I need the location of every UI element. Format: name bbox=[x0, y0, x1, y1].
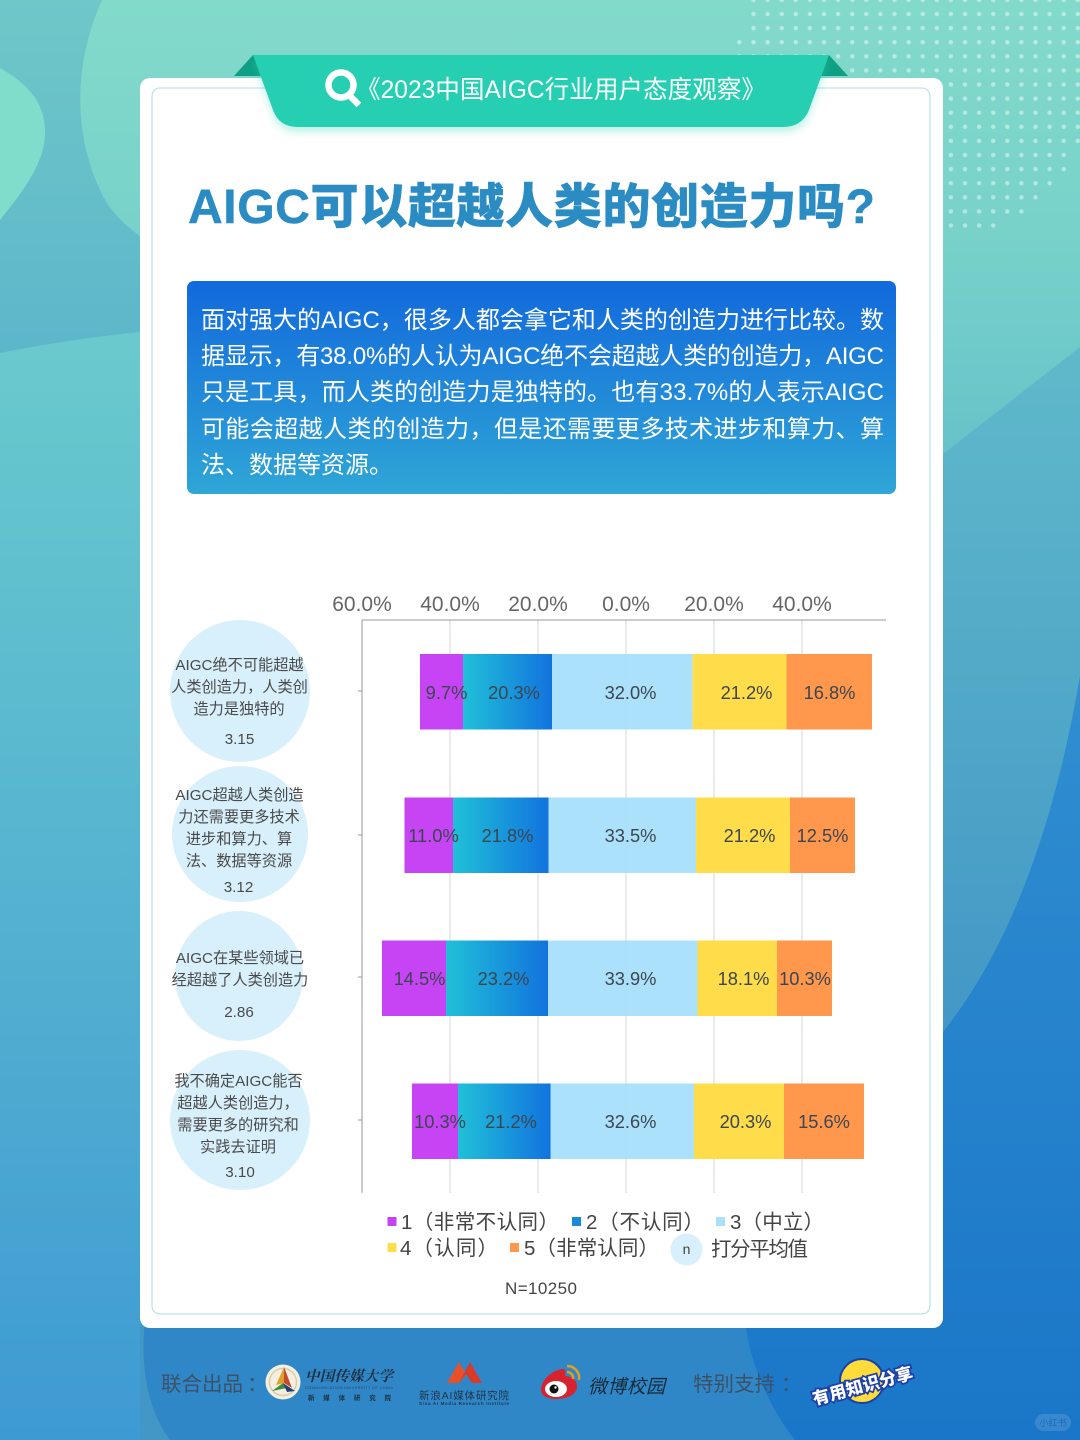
bar: row 2 bbox=[404, 798, 855, 873]
banner ribbon bbox=[234, 55, 848, 127]
icon: magnifier bbox=[328, 72, 359, 105]
intro text panel: 法、数据等资源。 bbox=[201, 452, 393, 479]
category: row 1 bbox=[170, 620, 310, 762]
banner title: 《2023中国AIGC行业用户态度观察》 bbox=[356, 76, 766, 104]
axis labels: 20.0% bbox=[684, 593, 744, 616]
logo: Sina AI Media Research Institute bbox=[419, 1362, 510, 1406]
axis labels: 20.0% bbox=[508, 593, 568, 616]
intro text panel: 可能会超越人类的创造力，但是还需要更多技术进步和算力、算 bbox=[201, 416, 884, 443]
logo: Weibo campus bbox=[541, 1366, 668, 1399]
category: row 3: 2.86 bbox=[224, 1004, 254, 1021]
axis labels bbox=[332, 593, 832, 616]
legend: 4（认同） bbox=[400, 1237, 498, 1260]
category: row 4: 需要更多的研究和 bbox=[177, 1117, 299, 1134]
footer: special support label: 特别支持 ： bbox=[693, 1373, 802, 1396]
category: row 1: 造力是独特的 bbox=[193, 701, 285, 718]
bar: row 4: 32.6% bbox=[605, 1111, 656, 1132]
bar: row 2: 21.2% bbox=[724, 825, 775, 846]
category: row 2 bbox=[172, 766, 308, 902]
bar: row 1: 9.7% bbox=[426, 682, 467, 703]
logo: Sina AI Media Research Institute: 新浪AI媒体研究院 bbox=[419, 1389, 510, 1402]
stacked bar chart bbox=[332, 593, 886, 1193]
category: row 2: 进步和算力、算 bbox=[186, 830, 292, 848]
intro text panel: 只是工具，而人类的创造力是独特的。也有33.7%的人表示AIGC bbox=[201, 379, 884, 406]
bar: row 4: 20.3% bbox=[720, 1111, 771, 1132]
category: row 3: AIGC在某些领域已 bbox=[176, 950, 304, 967]
axis labels: 60.0% bbox=[332, 593, 392, 616]
category: row 3 bbox=[172, 911, 308, 1041]
category: row 3: 经超越了人类创造力 bbox=[172, 972, 308, 989]
logo: Weibo campus: 微博校园 bbox=[588, 1376, 668, 1398]
category: row 1: 人类创造力，人类创 bbox=[171, 679, 308, 696]
bar: row 4: 21.2% bbox=[485, 1111, 537, 1132]
bar: row 3: 10.3% bbox=[779, 968, 831, 989]
bar: row 2: 21.8% bbox=[482, 825, 533, 846]
logo: Communication University of China: 新媒体研究院 bbox=[308, 1393, 392, 1402]
category: row 1: 3.15 bbox=[225, 731, 254, 748]
category: row 2: AIGC超越人类创造 bbox=[175, 787, 304, 804]
legend: 1（非常不认同） bbox=[401, 1211, 559, 1234]
intro text panel bbox=[187, 281, 896, 494]
bar: row 4 bbox=[412, 1084, 864, 1159]
legend: 打分平均值 bbox=[711, 1238, 808, 1261]
category: row 1: AIGC绝不可能超越 bbox=[175, 657, 304, 674]
main title: AIGC可以超越人类的创造力吗? bbox=[188, 181, 875, 234]
legend: n bbox=[683, 1241, 690, 1257]
category: row 2: 力还需要更多技术 bbox=[178, 809, 300, 826]
bar: row 3 bbox=[382, 940, 832, 1016]
bar: row 3: 23.2% bbox=[478, 968, 529, 989]
bar: row 1: 20.3% bbox=[488, 682, 540, 703]
bar: row 1 bbox=[420, 654, 872, 730]
legend: 3（中立） bbox=[730, 1211, 824, 1234]
bar: row 2: 11.0% bbox=[408, 825, 459, 846]
bar: row 3: 18.1% bbox=[718, 968, 769, 989]
logo: Communication University of China bbox=[266, 1364, 396, 1402]
bar: row 1: 16.8% bbox=[804, 682, 855, 703]
category: row 4: 实践去证明 bbox=[200, 1139, 276, 1156]
bar: row 2: 33.5% bbox=[605, 825, 656, 846]
bar: row 3: 33.9% bbox=[605, 968, 656, 989]
axis labels: 40.0% bbox=[420, 593, 480, 616]
legend: 2（不认同） bbox=[586, 1211, 704, 1234]
intro text panel: 据显示，有38.0%的人认为AIGC绝不会超越人类的创造力，AIGC bbox=[201, 343, 884, 370]
axis labels: 0.0% bbox=[602, 593, 650, 616]
legend bbox=[388, 1211, 824, 1266]
bar: row 4: 15.6% bbox=[798, 1111, 850, 1132]
logo: Communication University of China: COMMUNICATION UNIVERSITY OF CHINA bbox=[305, 1385, 393, 1390]
logo: Sina AI Media Research Institute: Sina AI Media Research Institute bbox=[419, 1401, 509, 1406]
category: row 4: 超越人类创造力， bbox=[177, 1095, 299, 1112]
card bbox=[140, 78, 943, 1328]
watermark: 小红书 bbox=[1039, 1417, 1067, 1428]
bar: row 3: 14.5% bbox=[394, 968, 445, 989]
bar: row 1: 21.2% bbox=[721, 682, 772, 703]
category: row 4: 3.10 bbox=[225, 1164, 255, 1181]
category: row 2: 法、数据等资源 bbox=[186, 852, 292, 870]
intro text panel: 面对强大的AIGC，很多人都会拿它和人类的创造力进行比较。数 bbox=[201, 307, 884, 334]
bar: row 4: 10.3% bbox=[414, 1111, 466, 1132]
watermark bbox=[1035, 1414, 1071, 1431]
legend: 5（非常认同） bbox=[524, 1237, 659, 1260]
logo: Communication University of China: 中国传媒大学 bbox=[305, 1365, 396, 1386]
bar: row 1: 32.0% bbox=[605, 682, 656, 703]
logo: useful knowledge sharing badge: 有用知识分享 bbox=[810, 1363, 915, 1409]
category: row 4: 我不确定AIGC能否 bbox=[174, 1073, 303, 1090]
bar: row 2: 12.5% bbox=[797, 825, 848, 846]
sample size note: N=10250 bbox=[505, 1279, 577, 1298]
category: row 4 bbox=[170, 1050, 310, 1190]
axis labels: 40.0% bbox=[772, 593, 832, 616]
footer: joint producers label: 联合出品： bbox=[161, 1373, 268, 1396]
category: row 2: 3.12 bbox=[224, 879, 253, 896]
